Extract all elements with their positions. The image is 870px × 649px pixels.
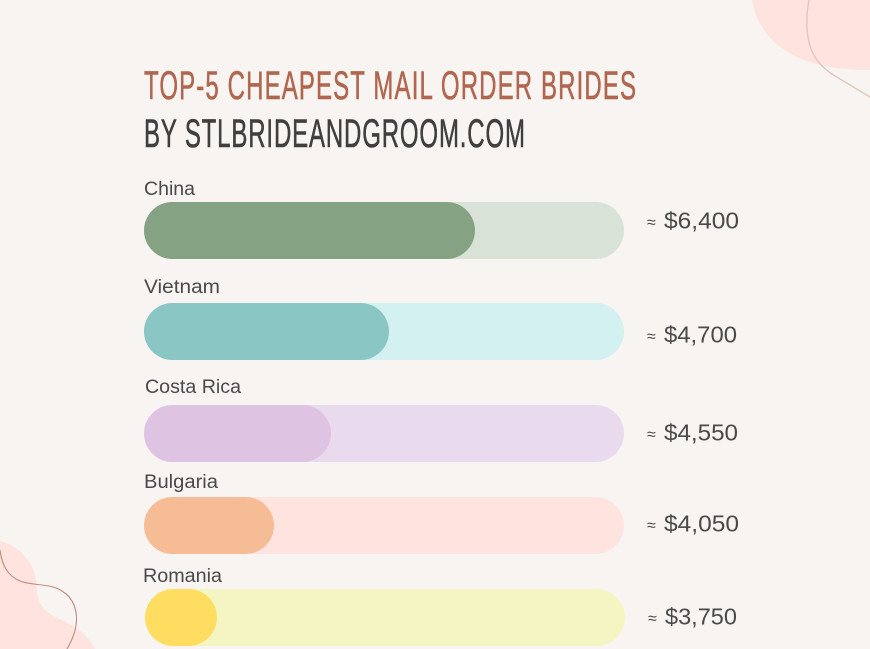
row: Costa Rica: Costa Rica xyxy=(145,377,241,398)
blob: bottom left decoration xyxy=(0,541,95,649)
row: Bulgaria: ≈ xyxy=(647,518,656,534)
row: Bulgaria xyxy=(144,472,739,554)
row: Costa Rica xyxy=(144,377,738,462)
row: Bulgaria: $4,050 xyxy=(664,510,739,536)
row: China: China xyxy=(144,179,195,200)
row: Vietnam: Vietnam xyxy=(144,277,220,298)
row: China xyxy=(144,179,739,259)
row: Romania: $3,750 xyxy=(665,604,737,630)
row: Romania: ≈ xyxy=(648,610,657,628)
row: Romania xyxy=(143,566,737,646)
row: Bulgaria: Bulgaria xyxy=(144,472,218,493)
row: Vietnam: ≈ xyxy=(647,328,656,346)
row: Romania: Romania xyxy=(143,566,222,587)
row: Costa Rica: $4,550 xyxy=(664,420,738,446)
row: Costa Rica: ≈ xyxy=(647,426,656,444)
title: TOP-5 CHEAPEST MAIL ORDER BRIDES xyxy=(144,63,636,107)
title xyxy=(144,63,636,155)
row: Vietnam xyxy=(144,277,737,360)
row: Vietnam: $4,700 xyxy=(664,322,737,348)
row: China: $6,400 xyxy=(664,208,739,234)
row: China: ≈ xyxy=(647,214,656,232)
blob: top right decoration xyxy=(752,0,870,97)
subtitle: BY STLBRIDEANDGROOM.COM xyxy=(144,111,525,155)
